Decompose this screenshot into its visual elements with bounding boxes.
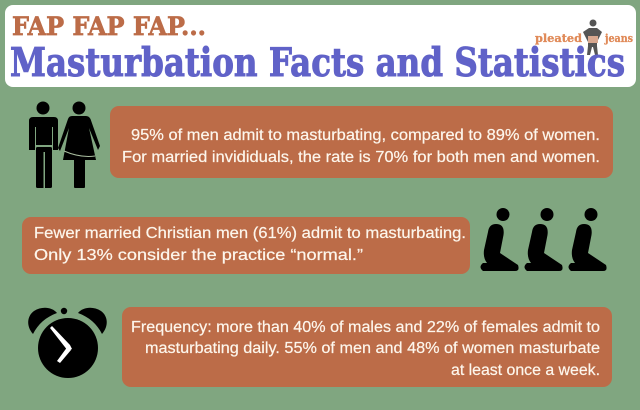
icon: couple [29,102,100,188]
panel: married rates [110,106,613,178]
text: frequency line 3: at least once a week. [451,362,600,379]
logo: pleated jeans [535,20,633,55]
header panel [5,5,636,87]
text: Christian line 1: Fewer married Christian men (61%) admit to masturbating. [34,225,466,242]
panel: frequency [122,307,612,387]
text: rates line 1: 95% of men admit to masturbating, compared to 89% of women. [131,127,600,144]
text: frequency line 1: Frequency: more than 40% of males and 22% of females admit to [131,319,600,336]
panel: Christian men [22,217,470,274]
logo: pleated jeans: pleated [535,32,582,45]
text: Christian line 2: Only 13% consider the practice “normal.” [34,247,363,264]
text: rates line 2: For married invididuals, the rate is 70% for both men and women. [122,149,600,166]
kicker heading: FAP FAP FAP... [12,12,206,41]
logo: pleated jeans: jeans [604,32,633,45]
text: frequency line 2: masturbating daily. 55% of men and 48% of women masturbate [145,340,600,357]
icon: kneeling figures [480,208,607,271]
icon: alarm clock [28,308,107,378]
